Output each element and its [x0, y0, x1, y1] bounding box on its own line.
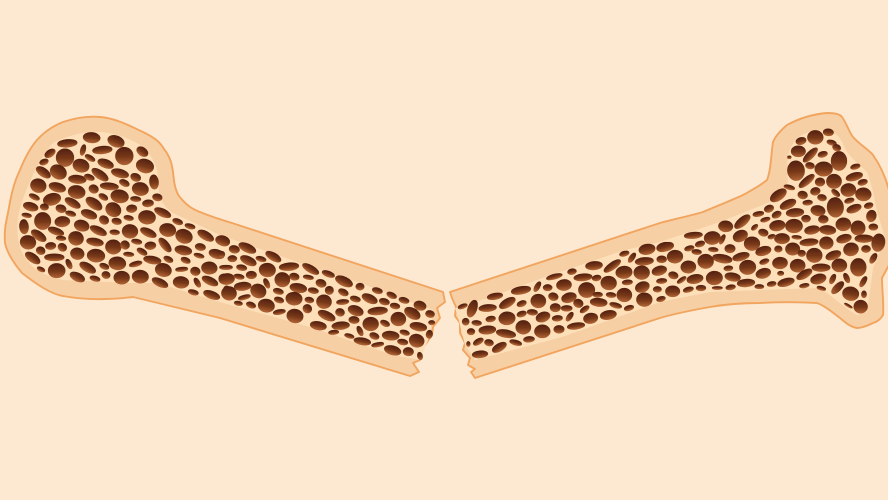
left bone shaft pores: [216, 235, 434, 360]
right bone outer wall: [450, 113, 888, 378]
left bone outer wall: [5, 117, 445, 376]
right bone head pores: [659, 129, 886, 313]
right bone fragment: [450, 113, 888, 378]
left bone head pores: [19, 132, 230, 301]
right bone shaft pores: [458, 241, 672, 358]
left bone inner spongy area: [17, 132, 433, 360]
left bone fragment: [5, 117, 445, 376]
right bone inner spongy area: [455, 130, 885, 360]
